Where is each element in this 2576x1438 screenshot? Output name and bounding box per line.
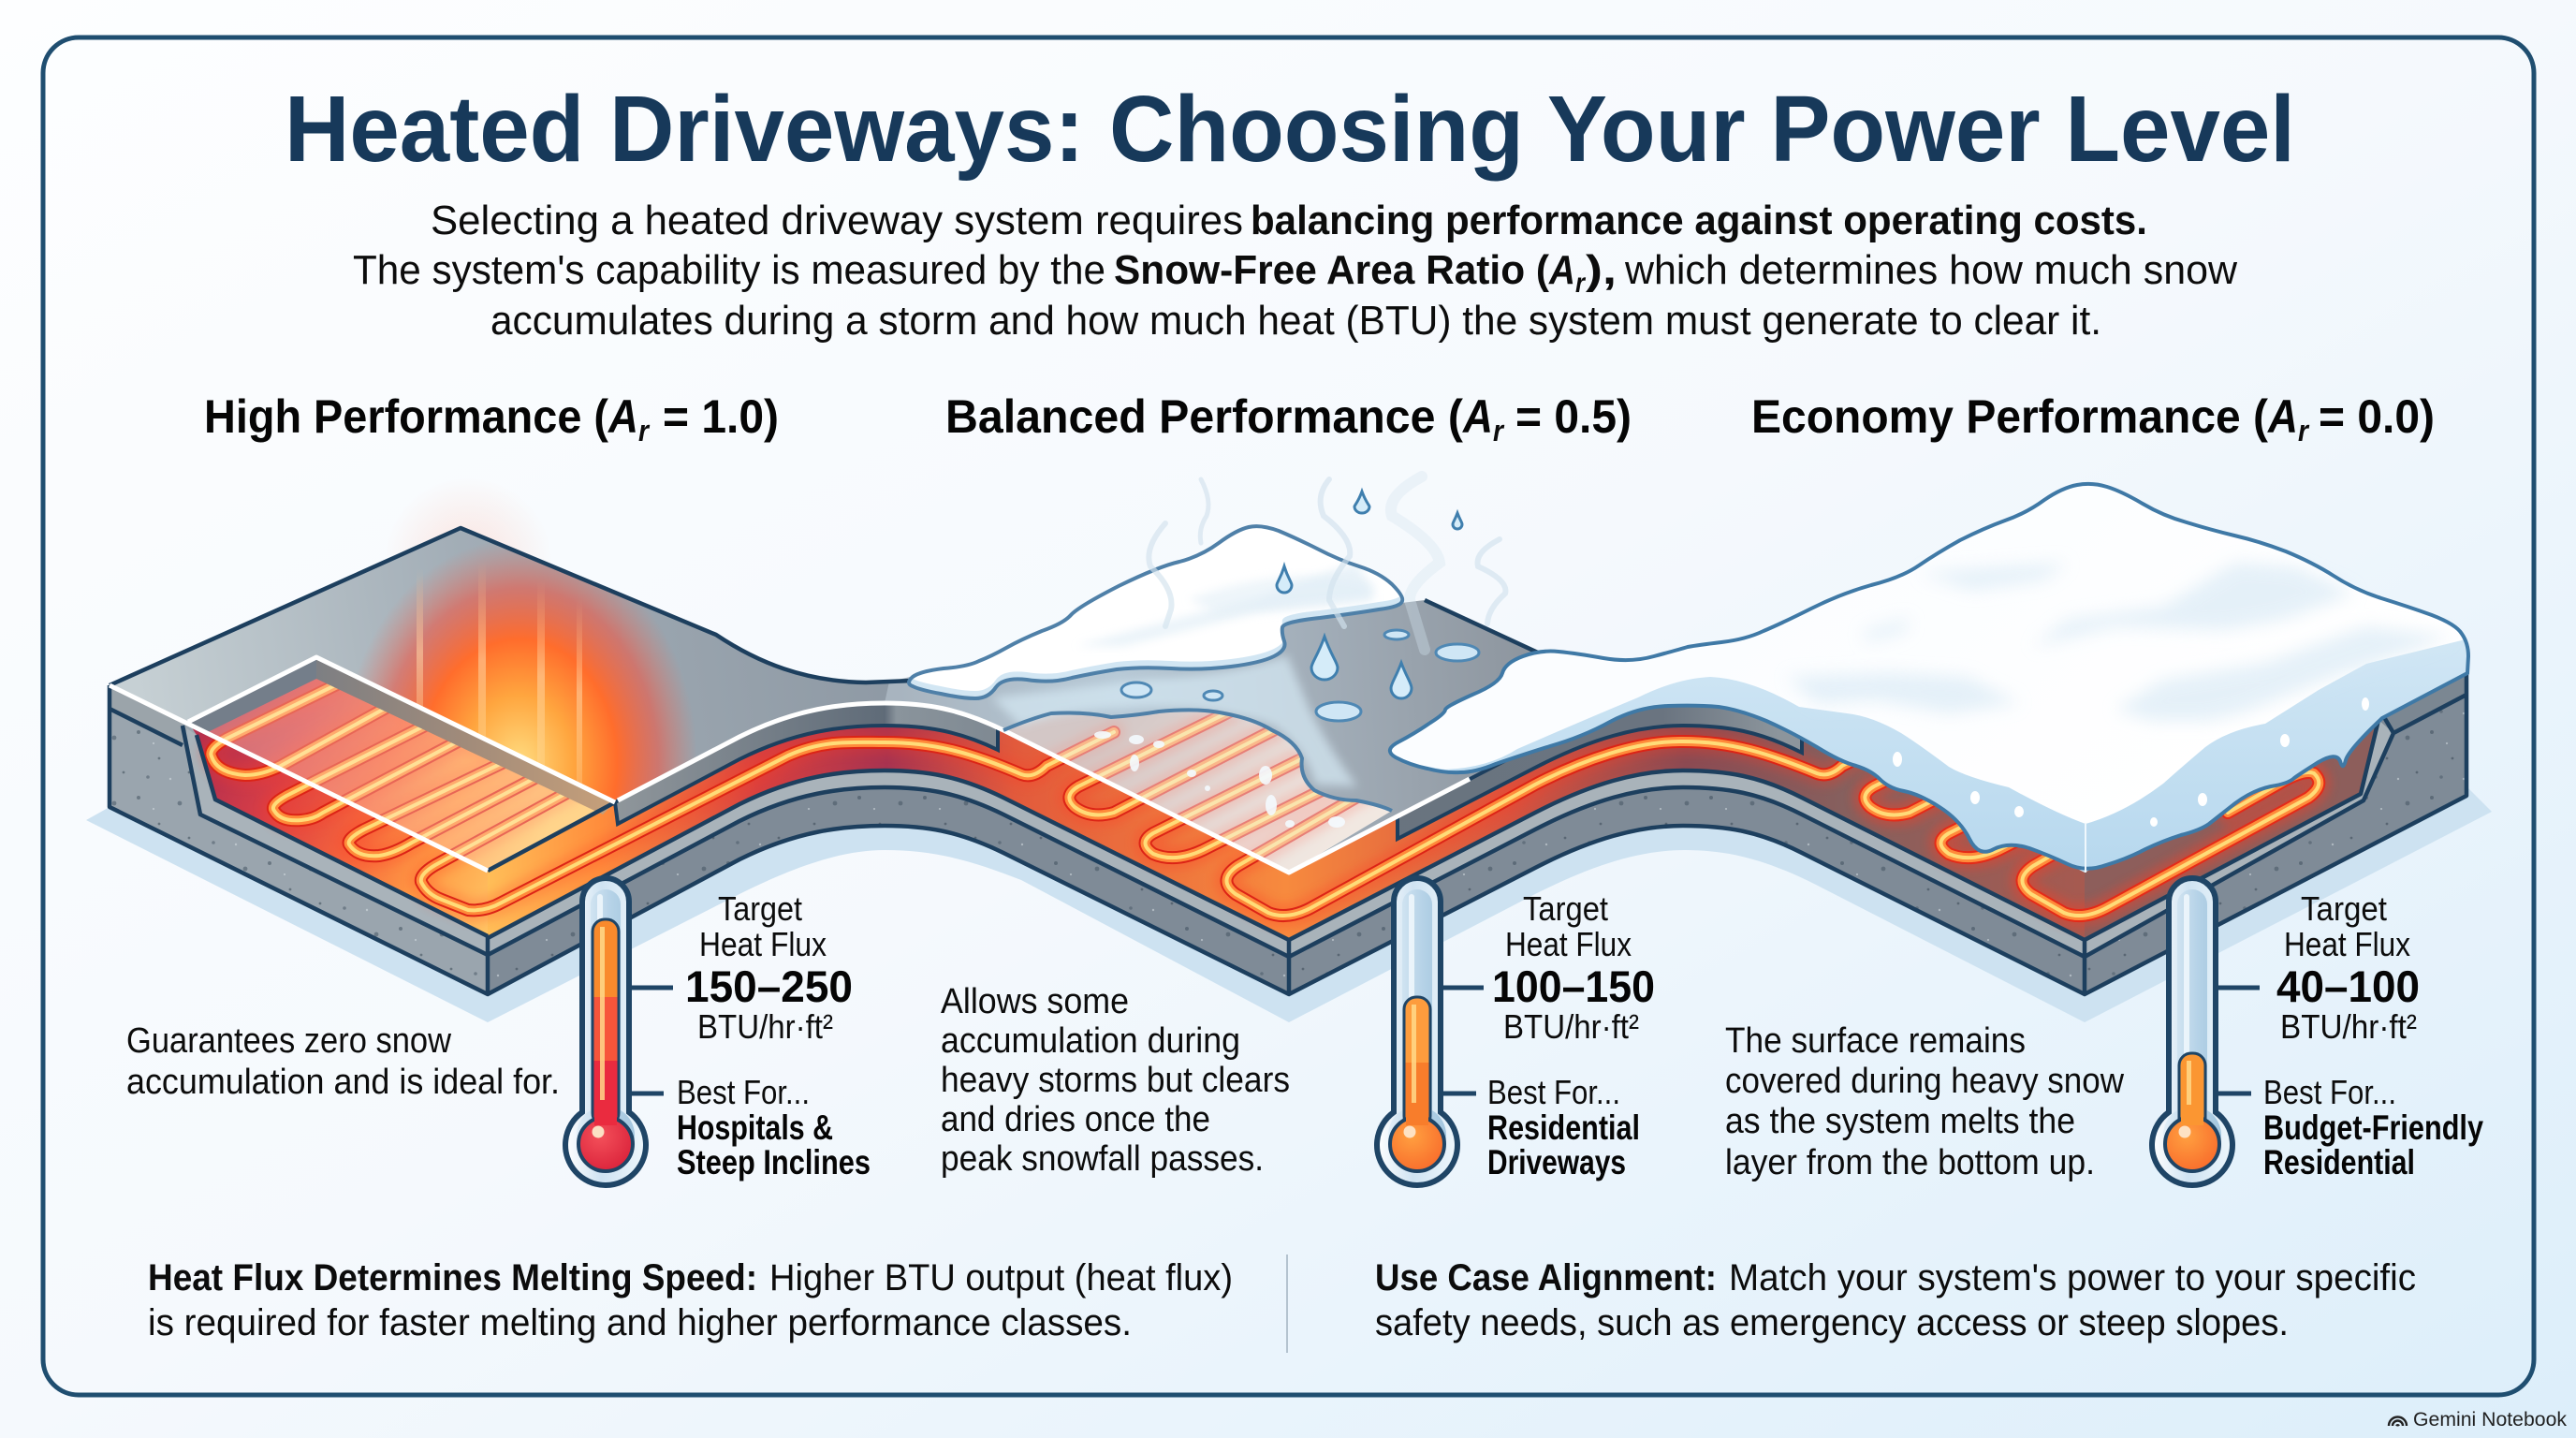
intro paragraph: [353, 198, 2237, 344]
high performance road surface: [110, 528, 936, 871]
balanced description: and dries once the: [941, 1100, 1210, 1139]
balanced wet road surface: [885, 600, 1554, 873]
heading: high performance: r: [638, 414, 650, 448]
high performance specs: Best For...: [677, 1073, 810, 1111]
economy specs: Budget-Friendly: [2263, 1108, 2483, 1147]
heading: balanced performance: A: [1461, 390, 1493, 443]
heading: high performance: = 1.0): [663, 390, 779, 443]
economy specs: [2263, 889, 2483, 1181]
economy specs: Best For...: [2263, 1073, 2396, 1111]
intro paragraph: ),: [1586, 247, 1617, 293]
intro paragraph: The system's capability is measured by the: [353, 247, 1105, 293]
heading: economy performance: = 0.0): [2319, 390, 2435, 443]
high performance specs: Heat Flux: [699, 925, 827, 963]
economy heated layer end: [2085, 720, 2378, 940]
balanced description: Allows some: [941, 982, 1129, 1021]
high performance specs: BTU/hr·ft²: [697, 1007, 833, 1046]
heading: economy performance: Economy Performance (: [1751, 390, 2268, 443]
heading: balanced performance: Balanced Performance (: [945, 390, 1463, 443]
title: Heated Driveways: Choosing Your Power Level: [285, 77, 2295, 182]
heading: balanced performance: = 0.5): [1515, 390, 1632, 443]
high performance specs: 150–250: [685, 961, 853, 1011]
watermark: Gemini Notebook: [2413, 1409, 2568, 1431]
water beads on snow: [1893, 697, 2369, 827]
snow drifts: [1787, 563, 2452, 721]
takeaway: use case: Use Case Alignment:: [1375, 1257, 1717, 1299]
high performance specs: [677, 889, 871, 1181]
top plate between windows: [615, 703, 998, 824]
balanced description: peak snowfall passes.: [941, 1139, 1264, 1179]
halo behind the heated slab: [384, 477, 552, 646]
heat glow on the surface: [361, 547, 691, 800]
balanced specs: Heat Flux: [1505, 925, 1632, 963]
driveway cross-section illustration: [86, 477, 2492, 1022]
high performance description: Guarantees zero snow: [126, 1021, 451, 1061]
balanced specs: Target: [1523, 889, 1608, 928]
heating pipes: [211, 683, 2319, 916]
economy description: layer from the bottom up.: [1725, 1143, 2095, 1182]
economy specs: BTU/hr·ft²: [2280, 1007, 2417, 1046]
intro paragraph: Selecting a heated driveway system requires: [431, 198, 1243, 243]
heated layer band: [488, 703, 2085, 940]
high performance description: [126, 1021, 560, 1102]
heading: economy performance: r: [2298, 414, 2309, 448]
high performance floor: [188, 657, 615, 936]
concrete base: [110, 673, 2466, 994]
ground shadow: [86, 712, 2492, 1022]
high performance specs: Target: [718, 889, 802, 928]
balanced description: [941, 982, 1290, 1179]
intro paragraph: balancing performance against operating costs.: [1251, 198, 2147, 243]
economy specs: Target: [2301, 889, 2387, 928]
balanced melt boundary: [1003, 710, 1392, 811]
balanced window floor: [1003, 710, 1392, 873]
balanced specs: 100–150: [1492, 961, 1655, 1011]
high performance specs: Steep Inclines: [677, 1143, 871, 1181]
intro paragraph: Snow-Free Area Ratio (: [1114, 247, 1549, 293]
water droplets: [1277, 492, 1462, 698]
takeaway: heat flux: Higher BTU output (heat flux): [769, 1257, 1233, 1299]
thermometer: high performance: [565, 878, 673, 1185]
thermometer: balanced: [1377, 878, 1484, 1185]
thermometer: economy: [2152, 878, 2260, 1185]
meltwater film: [992, 655, 1357, 786]
snow outline: [1390, 484, 2468, 869]
back wall of the cutaway: [316, 657, 615, 814]
takeaway: heat flux: is required for faster melting and higher performance classes.: [148, 1302, 1132, 1343]
intro paragraph: which determines how much snow: [1624, 247, 2237, 293]
economy description: The surface remains: [1725, 1021, 2026, 1061]
gravel layer band: [183, 720, 2393, 957]
balanced description: heavy storms but clears: [941, 1061, 1290, 1100]
ice chips on the glass: [1094, 731, 1345, 828]
takeaway: use case: Match your system's power to your specific: [1729, 1257, 2416, 1299]
steam wisps: [1149, 477, 1505, 650]
balanced specs: BTU/hr·ft²: [1503, 1007, 1639, 1046]
balanced specs: Best For...: [1487, 1073, 1620, 1111]
intro paragraph: r: [1575, 268, 1587, 299]
intro paragraph: A: [1548, 247, 1575, 293]
economy specs: 40–100: [2276, 961, 2420, 1011]
high performance specs: Hospitals &: [677, 1108, 833, 1147]
takeaway: heat flux: [148, 1257, 1233, 1343]
takeaway: heat flux: Heat Flux Determines Melting Speed:: [148, 1257, 757, 1299]
economy description: as the system melts the: [1725, 1102, 2075, 1141]
heading: high performance: High Performance (: [204, 390, 608, 443]
snow corner crease: [2085, 824, 2086, 873]
heading: balanced performance: r: [1493, 414, 1504, 448]
economy specs: Heat Flux: [2284, 925, 2410, 963]
snow top mass: [1390, 484, 2466, 824]
water puddles: [1121, 630, 1479, 721]
takeaway: use case: [1375, 1257, 2416, 1343]
bright front edges: [110, 657, 1470, 873]
left end plate: [110, 685, 188, 745]
balanced description: accumulation during: [941, 1021, 1240, 1061]
heading: economy performance: A: [2266, 390, 2298, 443]
top plate under snow: [1398, 703, 1802, 839]
balanced snow pile: [909, 519, 1402, 698]
left wall of the cutaway: [188, 657, 316, 732]
glass over high performance window: [188, 657, 615, 871]
economy snow blanket: [1390, 484, 2468, 873]
economy specs: Residential: [2263, 1143, 2415, 1181]
balanced specs: [1487, 889, 1655, 1181]
intro paragraph: accumulates during a storm and how much heat (BTU) the system must generate to clear it.: [490, 298, 2101, 344]
heading: high performance: A: [607, 390, 638, 443]
high performance description: accumulation and is ideal for.: [126, 1063, 560, 1102]
economy description: covered during heavy snow: [1725, 1062, 2125, 1101]
right end plate: [2384, 673, 2466, 733]
balanced specs: Residential: [1487, 1108, 1640, 1147]
glass over balanced window: [1003, 710, 1392, 873]
takeaway: use case: safety needs, such as emergency access or steep slopes.: [1375, 1302, 2289, 1343]
heading: high performance: [204, 390, 779, 448]
layer outlines: [110, 528, 2466, 994]
economy description: [1725, 1021, 2125, 1182]
balanced specs: Driveways: [1487, 1143, 1626, 1181]
